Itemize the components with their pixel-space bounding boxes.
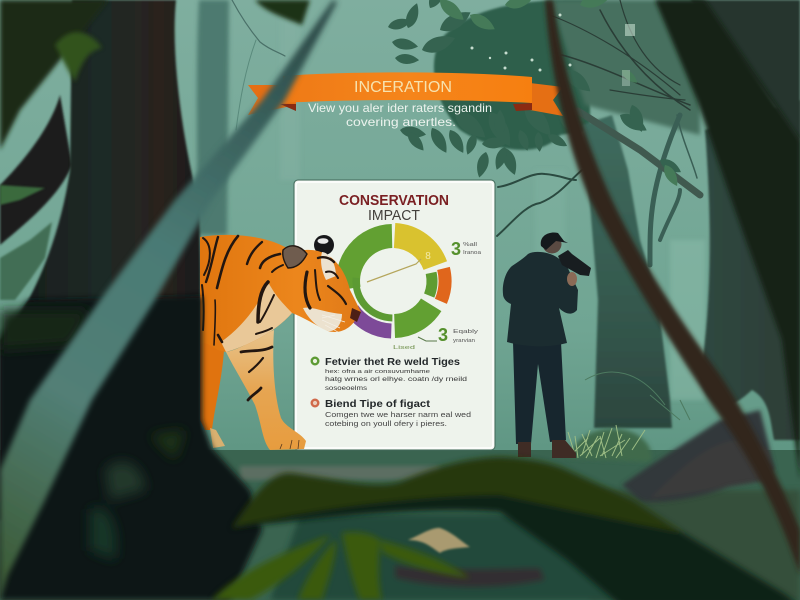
tiger front leg xyxy=(226,330,306,450)
left side branch xyxy=(0,95,72,245)
ribbon tails xyxy=(248,83,563,116)
foreground long diagonal leaf xyxy=(0,0,337,600)
thick diagonal branch xyxy=(578,111,700,195)
foreground right dark leaf xyxy=(655,0,800,480)
tiger whiskers xyxy=(322,315,345,332)
camera xyxy=(558,250,591,276)
tiger ear xyxy=(283,246,307,268)
banner subtitle: covering anertles. xyxy=(346,115,456,129)
foreground top left leaves xyxy=(0,0,310,300)
foreground bright fronds xyxy=(212,532,470,600)
list item 1: Fetvier thet Re weld Tiges xyxy=(325,356,460,368)
bare branches xyxy=(232,0,690,236)
tiger chest xyxy=(221,282,292,352)
fork branches xyxy=(650,115,697,265)
ribbon banner xyxy=(248,72,563,116)
lighter leaves xyxy=(436,0,681,188)
ribbon title: INCERATION xyxy=(354,79,452,96)
tiger ear behind xyxy=(314,235,334,255)
right large tree trunk xyxy=(700,100,800,440)
list item 1: hex: ofra a air consuvumhame xyxy=(325,369,430,375)
distant trees xyxy=(197,0,705,400)
upper right trunk xyxy=(690,0,800,140)
list item 2: Biend Tipe of figact xyxy=(325,398,431,410)
tiger rear leg xyxy=(200,340,225,448)
stat top: Iranoa xyxy=(463,250,481,256)
list item 2: cotebing on youll ofery i pieres. xyxy=(325,421,447,428)
tiger xyxy=(200,235,361,450)
tiger stripes xyxy=(202,236,346,400)
foreground dim olive leaves xyxy=(0,310,185,560)
grass clump xyxy=(568,372,690,462)
banner subtitle: View you aler ider raters sgandin xyxy=(308,101,492,115)
donut chart xyxy=(348,236,445,341)
list item 2: Comgen twe we harser narm eal wed xyxy=(325,412,471,419)
left big tree trunk xyxy=(0,0,200,520)
donut value: 8 xyxy=(425,251,431,262)
forest floor foreground patch xyxy=(270,515,620,600)
head and cap xyxy=(541,233,568,254)
tiger body xyxy=(200,235,361,352)
stat bottom: Eqably xyxy=(453,329,479,335)
stat top: %all xyxy=(463,242,477,248)
hand xyxy=(567,272,577,286)
donut small label: Lised xyxy=(393,345,415,351)
list item 1 xyxy=(312,356,468,392)
light gaps in canopy xyxy=(470,14,635,86)
info card xyxy=(294,180,495,450)
stat bottom xyxy=(438,325,479,345)
jacket xyxy=(503,252,578,346)
canopy foliage xyxy=(387,0,683,179)
canopy backdrop xyxy=(434,0,700,150)
card title: CONSERVATION xyxy=(339,193,449,209)
tan patch xyxy=(408,528,470,553)
ribbon band xyxy=(283,72,532,103)
mid right tree trunk xyxy=(582,115,672,428)
foreground brown stem xyxy=(545,0,800,575)
forest floor xyxy=(0,450,800,600)
stat top: 3 xyxy=(451,239,461,259)
list item 2 xyxy=(312,398,471,428)
list item 1: sosoeoelms xyxy=(325,386,367,392)
tiger nose xyxy=(350,308,361,322)
stat top xyxy=(451,239,481,259)
card title xyxy=(339,193,449,224)
legs xyxy=(513,342,566,444)
foreground lower left darkness xyxy=(0,296,262,600)
tiger face white xyxy=(303,252,342,331)
shoes xyxy=(518,440,576,458)
stat bottom: yrarvian xyxy=(453,338,475,344)
photographer xyxy=(503,233,591,458)
tree roots right xyxy=(622,410,775,502)
card title: IMPACT xyxy=(368,207,420,224)
tiger paw marks xyxy=(280,440,299,449)
list item 1: hatg wrnes orl elhye. coatn /dy rneild xyxy=(325,376,468,383)
foreground broad leaf xyxy=(232,457,800,600)
stat bottom: 3 xyxy=(438,325,448,345)
banner subtitle xyxy=(308,101,492,129)
